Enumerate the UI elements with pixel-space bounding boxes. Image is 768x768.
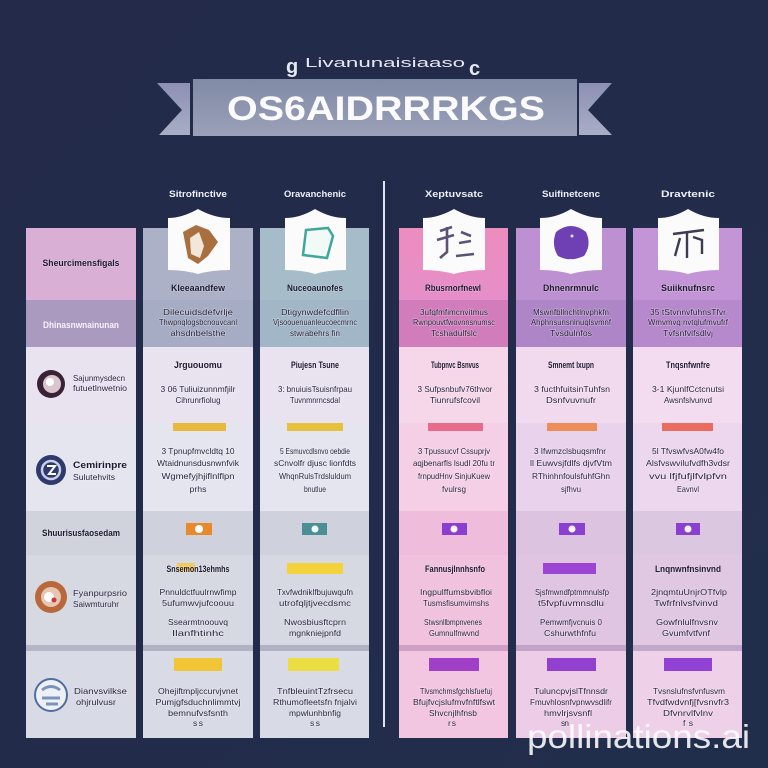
small tag icon xyxy=(676,523,700,535)
row four text xyxy=(157,446,240,494)
label: row three: Sajunmysdecn xyxy=(73,373,125,383)
icon: copper badge xyxy=(35,581,67,613)
panel: option three xyxy=(399,209,508,738)
row four text: sCnvolfr djusc lionfdts xyxy=(274,458,356,468)
title: OS6AIDRRRKGS xyxy=(227,90,545,128)
description xyxy=(159,307,237,338)
row six text: Stwsnllbmpnvenes xyxy=(424,617,482,627)
label: row four: Sulutehvits xyxy=(73,472,115,482)
row three text: Piujesn Tsune xyxy=(291,360,339,370)
row four text: Wgmefyjhjiflnlflpn xyxy=(162,471,235,481)
row six text: Ssearmtnoouvq xyxy=(168,617,228,627)
row three text: Jrguouomu xyxy=(174,360,222,370)
row three text xyxy=(160,360,236,405)
label: row three: futuetlnwetnio xyxy=(73,383,127,393)
panel: option two xyxy=(260,209,369,738)
subtitle: c xyxy=(469,58,480,80)
row three text: Cihrunrfiolug xyxy=(176,395,221,405)
row six text: Fannusjlnnhsnfo xyxy=(425,564,485,574)
row seven text: ss xyxy=(193,718,203,728)
small tag icon xyxy=(186,523,212,535)
banner body xyxy=(193,79,577,136)
row four text: bnutlue xyxy=(304,484,326,494)
label: row one: Sheurcimensfigals xyxy=(42,258,120,268)
icon: pale blue badge xyxy=(35,679,67,711)
row three text xyxy=(652,360,724,405)
description xyxy=(648,307,729,338)
row seven text: Bfujfvcjslufmvfnftlfswt xyxy=(413,697,496,707)
row six text xyxy=(651,564,727,638)
row six text xyxy=(420,564,492,638)
label: row two: Dhinasnwnainunan xyxy=(43,320,119,330)
row three text: 3 06 Tuliuizunnmfjilr xyxy=(160,384,236,394)
rating bar xyxy=(662,423,713,431)
column headings: Xeptuvsatc xyxy=(425,189,483,199)
description: Mswnfbllnchtlnvphkfn xyxy=(533,307,609,317)
row seven text: Dfvnrvlfvlnv xyxy=(663,708,714,718)
description: Dilecuidsdefvrlje xyxy=(163,307,233,317)
row three text: Tubpnvc Bsnvus xyxy=(431,360,479,370)
row six text: t5fvpfuvmnsdlu xyxy=(538,598,604,608)
small tag icon xyxy=(442,523,467,535)
row three text: Awsnfslvunvd xyxy=(664,395,712,405)
row seven text: bemnufvsfsnth xyxy=(168,708,228,718)
left ribbon tail xyxy=(157,83,190,135)
column headings: Sitrofinctive xyxy=(169,189,227,199)
rating bar xyxy=(428,423,483,431)
label: row seven xyxy=(74,686,127,707)
row three text: Tuvnmnrncsdal xyxy=(290,395,340,405)
row three text: Smnemt Ixupn xyxy=(548,360,594,370)
row seven text xyxy=(413,686,496,728)
row seven text: Shvcnjlhfnsb xyxy=(429,708,477,718)
subtitle: g xyxy=(286,56,298,78)
row four text: 5 Esmuvcdlsnvo oebdie xyxy=(280,446,350,456)
vertical divider xyxy=(383,181,385,727)
subtitle: Livanunaisiaaso xyxy=(305,55,465,70)
description: Tvsdulnfos xyxy=(550,328,592,338)
row four text: frnpudHnv SinjuKuew xyxy=(418,471,491,481)
row six text: Tusmsfisumvimshs xyxy=(423,598,489,608)
label: row six xyxy=(73,588,127,609)
rating bar xyxy=(288,658,339,671)
row seven text: Tvsnslufnsfvnfusvm xyxy=(653,686,725,696)
title banner xyxy=(157,79,612,136)
row six text: Pnnuldctfuulrnwfimp xyxy=(160,587,237,597)
row four text: Alsfvswvilufvdfh3vdsr xyxy=(646,458,730,468)
row six text xyxy=(535,587,609,638)
row four text xyxy=(530,446,612,494)
description: Rwnpouvtfwovnnsnumsc xyxy=(413,317,496,327)
row seven text xyxy=(273,686,357,728)
label: row three xyxy=(73,373,127,393)
row four text: vvu lfjfufjlfvlpfvn xyxy=(649,471,727,481)
row four text: aqjbenarfls lsudl 20fu tr xyxy=(413,458,495,468)
row four text xyxy=(646,446,730,494)
row seven text: ss xyxy=(310,718,320,728)
icon badge: glyph mark xyxy=(658,209,719,274)
description: Tcshadulfslc xyxy=(431,328,478,338)
row four text: RThinhnfoulsfuhfGhn xyxy=(532,471,610,481)
description xyxy=(273,307,358,338)
row seven text xyxy=(647,686,729,728)
row four text xyxy=(413,446,495,494)
subtitle xyxy=(286,55,480,80)
panel: option one xyxy=(143,209,253,738)
icon badge: glyph mark xyxy=(423,209,485,274)
rating bar xyxy=(664,658,712,671)
rating bar xyxy=(173,423,226,431)
panel: option five xyxy=(633,209,742,738)
icon: dark badge xyxy=(37,370,65,398)
description: Ahphnsunsnlnuqlsvmnf xyxy=(531,317,612,327)
label: row seven: Dianvsvilkse xyxy=(74,686,127,696)
description: ahsdnbelsthe xyxy=(170,328,226,338)
option name: Dhnenrmnulc xyxy=(543,283,599,293)
row six text: Gowfnlulfnvsnv xyxy=(656,617,719,627)
row four text: sjfhvu xyxy=(561,484,581,494)
row six text: 2jnqmtuUnjrOTfvlp xyxy=(651,587,727,597)
row four text xyxy=(274,446,356,494)
row seven text: rs xyxy=(448,718,456,728)
option name: Nuceoaunofes xyxy=(287,283,343,293)
row seven text: Fmuvhlosnfvpnwvsdlifr xyxy=(530,697,612,707)
rating bar xyxy=(547,658,596,671)
row three text: 3 fucthfuitsinTuhfsn xyxy=(534,384,610,394)
description: Thwpnqlogsbcnouvcanl xyxy=(159,317,237,327)
row four text: WhqnRulsTrdsluldum xyxy=(279,471,351,481)
description: Vjsoouenuanleucoecmrnc xyxy=(273,317,358,327)
row six text: 5ufumwvjufcoouu xyxy=(162,598,234,608)
row six text: utrofqljtjvecdsmc xyxy=(279,598,352,608)
rating bar xyxy=(543,563,596,574)
row three text: Tiunrufsfcovil xyxy=(430,395,480,405)
row seven text: Tfvdfwdvnfj[fvsnvfr3 xyxy=(647,697,729,707)
row seven text xyxy=(530,686,612,728)
description: Wmvmvq nvtqlufmvufrf xyxy=(648,317,729,327)
row seven text: TnfbleuintTzfrsecu xyxy=(277,686,353,696)
row seven text: mpwlunhbnfig xyxy=(289,708,341,718)
label: row six: Fyanpurpsrio xyxy=(73,588,127,598)
row seven text: TuluncpvjslTfnnsdr xyxy=(534,686,608,696)
row three text xyxy=(534,360,610,405)
icon badge: bronze shield xyxy=(168,209,230,274)
row four text: fvulrsg xyxy=(442,484,466,494)
rating bar xyxy=(287,423,343,431)
row seven text: Ohejiftmpljccurvjvnet xyxy=(158,686,239,696)
rating bar xyxy=(287,563,343,574)
rating bar xyxy=(547,423,597,431)
column headings xyxy=(169,189,715,199)
row seven text: sn xyxy=(561,718,569,728)
row seven text: Tlvsmchmsfgchlsfuefuj xyxy=(420,686,492,696)
row four text: 3 Ifwmzclsbuqsmfnr xyxy=(534,446,606,456)
icon badge: teal frame xyxy=(285,209,346,274)
column headings: Oravanchenic xyxy=(284,189,346,199)
label: row four: Cemirinpre xyxy=(73,460,127,470)
row six text: mgnkniejpnfd xyxy=(289,628,341,638)
description xyxy=(531,307,612,338)
row six text: Pemwmfjvcnuis 0 xyxy=(540,617,602,627)
row six text: Snsemon13ehmhs xyxy=(166,564,230,574)
description: 35 tStvnnvfuhnsTfvr xyxy=(650,307,726,317)
small tag icon xyxy=(559,523,585,535)
row six text: Txvfwdniklfbujuwqufn xyxy=(277,587,353,597)
row six text: Cshurwthfnfu xyxy=(544,628,596,638)
watermark: pollinations.ai xyxy=(527,718,750,755)
row three text: Dsnfvuvnufr xyxy=(546,395,596,405)
row four text: prhs xyxy=(190,484,206,494)
label: row six: Saiwmturuhr xyxy=(73,599,119,609)
row six text: Nwosbiusftcprn xyxy=(284,617,346,627)
row three text: 3 Sufpsnbufv76thvor xyxy=(418,384,493,394)
description: Tvfsnfvlfsdlvj xyxy=(663,328,713,338)
row seven text xyxy=(156,686,241,728)
row six text: Ilanfhtinhc xyxy=(172,628,225,638)
row seven text: fs xyxy=(683,718,693,728)
row three text xyxy=(418,360,493,405)
panel: option four xyxy=(516,209,626,738)
row six text xyxy=(160,563,237,638)
option name: Suiiknufnsrc xyxy=(661,283,715,293)
row six text: Twfrfnlvsfvinvd xyxy=(654,598,718,608)
row three text xyxy=(278,360,352,405)
row six text: Lnqnwnfnsinvnd xyxy=(655,564,721,574)
row four text: ll Euwvsjfdlfs djvfVtm xyxy=(530,458,612,468)
option name: Kleeaandfew xyxy=(171,283,226,293)
panel: row labels xyxy=(26,228,136,738)
description: stwrabehrs fin xyxy=(290,328,340,338)
small tag icon xyxy=(302,523,327,535)
row four text: 5l TfvswfvsA0fw4fo xyxy=(652,446,724,456)
row six text: Ingpulffumsbvibfloi xyxy=(420,587,492,597)
row six text: Sjsfmwndfptmmnulsfp xyxy=(535,587,609,597)
description: 3ufqfmfimcnvitmus xyxy=(420,307,488,317)
label: row seven: ohjrulvusr xyxy=(76,697,116,707)
rating bar xyxy=(174,658,222,671)
label: row four xyxy=(73,460,127,482)
column headings: Suifinetcenc xyxy=(542,189,600,199)
row seven text: hmvlrjsvsnfl xyxy=(544,708,592,718)
label: row five: Shuurisusfaosedam xyxy=(42,528,120,538)
row four text: Eavnvl xyxy=(677,484,699,494)
row four text: 3 Tpnupfmvcldtq 10 xyxy=(162,446,235,456)
description xyxy=(413,307,496,338)
column headings: Dravtenic xyxy=(661,189,715,199)
option name: Rbusrnorfnewl xyxy=(425,283,481,293)
row seven text: Pumjgfsduchnlimmtvj xyxy=(156,697,241,707)
description: Dtigynwdefcdfllin xyxy=(281,307,349,317)
row seven text: Rthumofleetsfn fnjalvi xyxy=(273,697,357,707)
rating bar xyxy=(429,658,479,671)
row four text: 3 Tpussucvf Cssuprjv xyxy=(418,446,491,456)
row six text: Gumnulfnwvnd xyxy=(429,628,479,638)
icon: navy badge xyxy=(36,455,66,485)
row three text: 3-1 KjunlfCctcnutsi xyxy=(652,384,724,394)
right ribbon tail xyxy=(579,83,612,135)
row six text: Gvumfvtfvnf xyxy=(662,628,711,638)
icon badge: purple blob xyxy=(540,209,602,274)
row three text: 3: bnuiuisTsuisnfrpau xyxy=(278,384,352,394)
row four text: Wtaidnunsdusnwnfvik xyxy=(157,458,240,468)
row three text: Tnqsnfwnfre xyxy=(666,360,710,370)
row six text xyxy=(277,587,353,638)
